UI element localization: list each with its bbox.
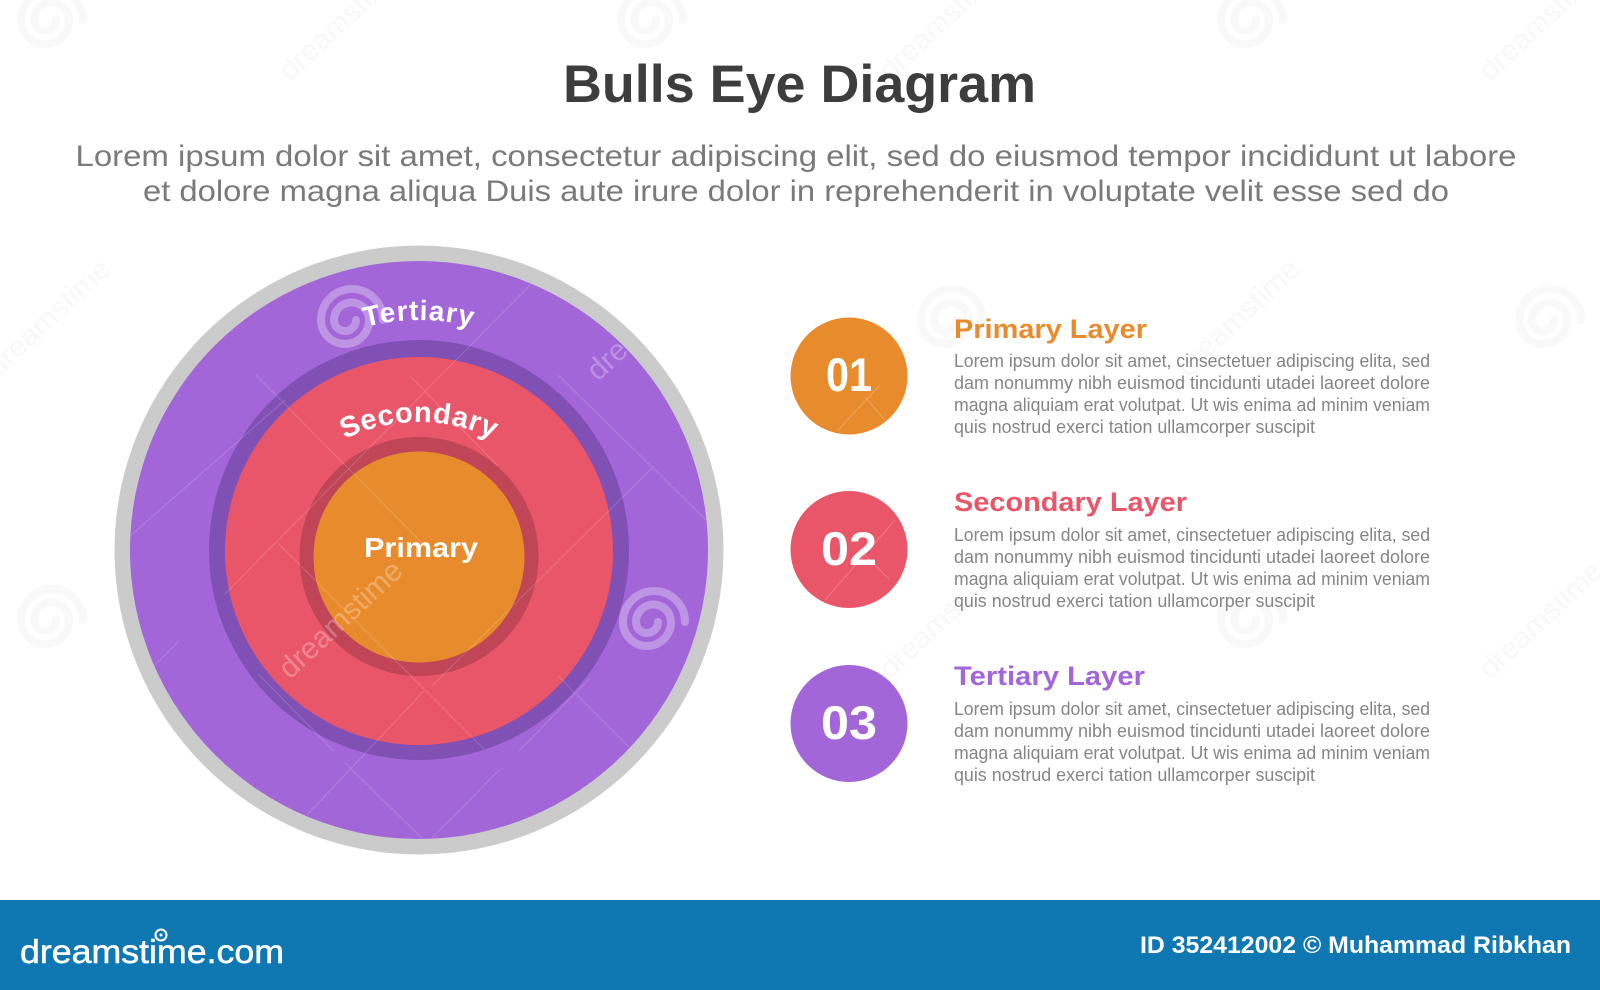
- badge 01: [790, 318, 908, 434]
- infographic canvas: dreamstime: [1169, 252, 1306, 383]
- list item 01: primary layer: [790, 314, 1430, 437]
- badge 03: 03: [821, 696, 877, 749]
- heading: Tertiary Layer: Tertiary Layer: [954, 661, 1146, 691]
- watermark wordmarks on diagram: dreamstime: [272, 554, 409, 685]
- description 03: quis nostrud exerci tation ullamcorper suscipit: [954, 765, 1315, 785]
- description 02: Lorem ipsum dolor sit amet, cinsectetuer adipiscing elita, sed: [954, 525, 1430, 545]
- description 01: quis nostrud exerci tation ullamcorper suscipit: [954, 417, 1315, 437]
- watermark wordmarks on diagram: [272, 256, 717, 685]
- ring: secondary red: [225, 357, 613, 745]
- footer logo: dreamstime.com: [20, 933, 284, 970]
- heading: Secondary Layer: Secondary Layer: [954, 487, 1188, 517]
- subtitle text block: Lorem ipsum dolor sit amet, consectetur adipiscing elit, sed do eiusmod tempor incididunt ut labore: [76, 140, 1516, 173]
- ring: secondary inner shadow: [300, 437, 538, 676]
- heading: Primary Layer: Primary Layer: [954, 314, 1148, 344]
- footer credit: ID 352412002 © Muhammad Ribkhan: [1140, 932, 1571, 959]
- description 02: [954, 525, 1430, 611]
- description 03: Lorem ipsum dolor sit amet, cinsectetuer adipiscing elita, sed: [954, 699, 1430, 719]
- watermark wordmarks on diagram: dreamstime: [580, 256, 717, 387]
- watermark lines on diagram: [129, 284, 706, 844]
- ring: tertiary purple: [130, 261, 708, 839]
- label: Secondary: Secondary: [340, 403, 499, 440]
- description 01: magna aliquiam erat volutpat. Ut wis enima ad minim veniam: [954, 395, 1430, 415]
- description 02: magna aliquiam erat volutpat. Ut wis enima ad minim veniam: [954, 569, 1430, 589]
- badge 02: [790, 491, 908, 608]
- badge 01: 01: [826, 348, 872, 401]
- subtitle text block: [76, 140, 1516, 208]
- subtitle text block: et dolore magna aliqua Duis aute irure dolor in reprehenderit in voluptate velit esse sed do: [143, 175, 1449, 208]
- badge 03: [790, 665, 908, 782]
- label: Primary: Primary: [364, 532, 478, 563]
- description 03: [954, 699, 1430, 785]
- description 02: quis nostrud exerci tation ullamcorper suscipit: [954, 591, 1315, 611]
- circle: primary orange: [314, 452, 524, 662]
- description 01: [954, 351, 1430, 437]
- title: Bulls Eye Diagram: [563, 55, 1036, 114]
- description 02: dam nonummy nibh euismod tincidunti utadei laoreet dolore: [954, 547, 1430, 567]
- description 01: dam nonummy nibh euismod tincidunti utadei laoreet dolore: [954, 373, 1430, 393]
- description 03: magna aliquiam erat volutpat. Ut wis enima ad minim veniam: [954, 743, 1430, 763]
- footer band: [0, 900, 1600, 990]
- list item 02: secondary layer: [790, 487, 1430, 611]
- watermark spirals on diagram: [321, 289, 685, 646]
- badge 02: 02: [821, 522, 877, 575]
- bulls eye diagram: [114, 246, 724, 854]
- infographic canvas: dreamstime: [872, 554, 1009, 685]
- description 03: dam nonummy nibh euismod tincidunti utadei laoreet dolore: [954, 721, 1430, 741]
- description 01: Lorem ipsum dolor sit amet, cinsectetuer adipiscing elita, sed: [954, 351, 1430, 371]
- list item 03: tertiary layer: [790, 661, 1430, 785]
- ring: outer grey border: [114, 246, 724, 854]
- ring: tertiary inner shadow: [209, 340, 629, 760]
- label: Tertiary: Tertiary: [361, 300, 475, 330]
